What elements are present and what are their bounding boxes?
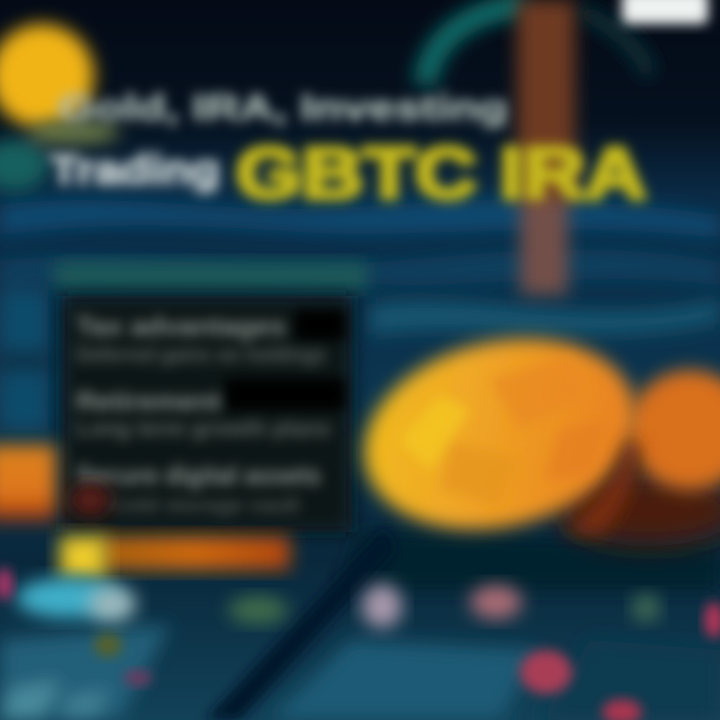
panel body <box>62 296 352 532</box>
list item four: Secure digital assets <box>76 460 321 490</box>
title line two: Trading <box>50 146 220 193</box>
button: orange bar <box>60 536 290 578</box>
small coin <box>628 370 720 490</box>
icon: pink marker lower <box>602 699 642 720</box>
list item four detail: Cold storage vault <box>110 495 300 517</box>
panel header <box>55 262 367 290</box>
list accent <box>70 484 110 516</box>
list item two: Retirement <box>76 386 221 416</box>
button icon <box>60 536 106 578</box>
panel: list <box>55 262 367 532</box>
list item one detail: Deferred gains on holdings <box>76 342 326 367</box>
bottom ground panels <box>0 625 720 720</box>
icon: pale pink shape <box>362 584 402 628</box>
icon: coral shape <box>470 585 522 619</box>
button fill <box>100 536 290 570</box>
ocean waves <box>0 199 720 590</box>
icon: pink small <box>124 670 152 686</box>
panel dark patches <box>225 310 345 410</box>
coastline below the sun <box>0 120 120 191</box>
list item one: Tax advantages <box>76 311 286 341</box>
coin shadow <box>560 474 720 546</box>
icon: green shape <box>228 596 288 624</box>
bottom scattered icons <box>0 568 720 720</box>
icon: pink marker <box>520 650 572 694</box>
icon: pink left edge <box>0 568 13 600</box>
coin rim shadow <box>560 440 640 535</box>
palm frond arc <box>425 5 650 85</box>
coin surface texture <box>400 355 610 505</box>
icon: pink right edge <box>704 602 720 638</box>
icon: green small <box>632 594 660 622</box>
gold coins <box>344 311 720 557</box>
icon: olive shape <box>94 633 122 657</box>
bottom road diagonal <box>205 528 395 720</box>
title <box>50 87 646 214</box>
icon: light blue shape <box>16 578 120 618</box>
title line one: Gold, IRA, Investing <box>58 87 508 128</box>
palm trunk <box>517 0 575 295</box>
icon: pale shape <box>88 586 136 622</box>
title highlight: GBTC IRA <box>236 134 646 214</box>
top-right white glow <box>622 0 708 24</box>
large coin <box>344 311 656 557</box>
list item three: Long term growth plans <box>76 416 331 441</box>
sun <box>0 24 94 128</box>
orange side block <box>0 445 56 521</box>
